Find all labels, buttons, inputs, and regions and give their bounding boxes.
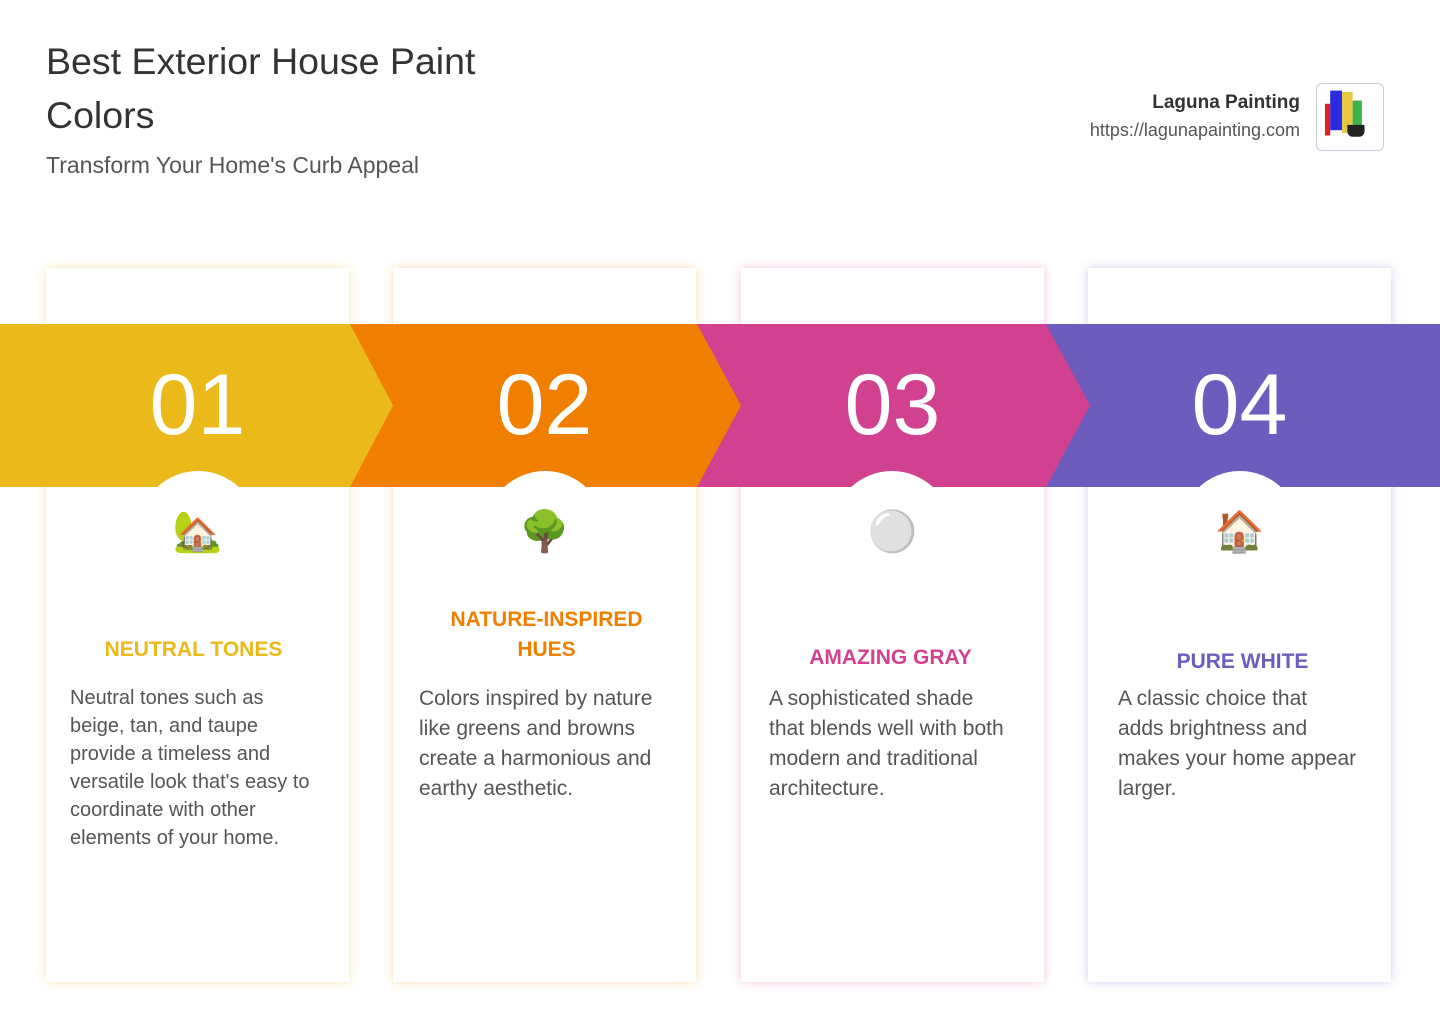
texts: Neutral tones such as beige, tan, and taupe provide a timeless and versatile look that's easy to coordinate with other elements of your home. [70, 687, 310, 849]
text: HUES [517, 638, 576, 661]
brand: Laguna Painting [1152, 92, 1300, 113]
icons: 🏡 [173, 508, 222, 555]
banner arrows [0, 324, 1440, 487]
text: makes your home appear [1118, 747, 1356, 770]
text: that blends well with both [769, 717, 1004, 740]
text: 04 [1192, 357, 1287, 453]
text: A classic choice that [1118, 687, 1307, 710]
logo [1316, 83, 1384, 151]
card 1 [46, 268, 349, 982]
circles [138, 471, 258, 591]
title [46, 40, 476, 136]
text: PURE WHITE [1177, 650, 1308, 673]
text: architecture. [769, 777, 885, 800]
brand [1090, 92, 1300, 140]
text: NATURE-INSPIRED [450, 608, 643, 631]
text: adds brightness and [1118, 717, 1307, 740]
title: Best Exterior House Paint [46, 40, 475, 82]
subtitle: Transform Your Home's Curb Appeal [46, 152, 419, 178]
text: AMAZING GRAY [809, 646, 972, 669]
text: A sophisticated shade [769, 687, 973, 710]
brand: https://lagunapainting.com [1090, 120, 1300, 140]
text: Colors inspired by nature like greens and browns create a harmonious and earthy aesthetic. [419, 687, 652, 800]
card 3 [741, 268, 1044, 982]
numbers: 01 [150, 357, 245, 453]
text: modern and traditional [769, 747, 978, 770]
text: 02 [497, 357, 592, 453]
text: ⚪ [868, 508, 917, 555]
card 2 [393, 268, 696, 982]
text: 🏠 [1215, 508, 1264, 555]
text: 🌳 [520, 508, 569, 555]
text: 03 [845, 357, 940, 453]
card 4 [1088, 268, 1391, 982]
headings: NEUTRAL TONES [105, 638, 282, 661]
title: Colors [46, 94, 154, 136]
text: larger. [1118, 777, 1176, 800]
